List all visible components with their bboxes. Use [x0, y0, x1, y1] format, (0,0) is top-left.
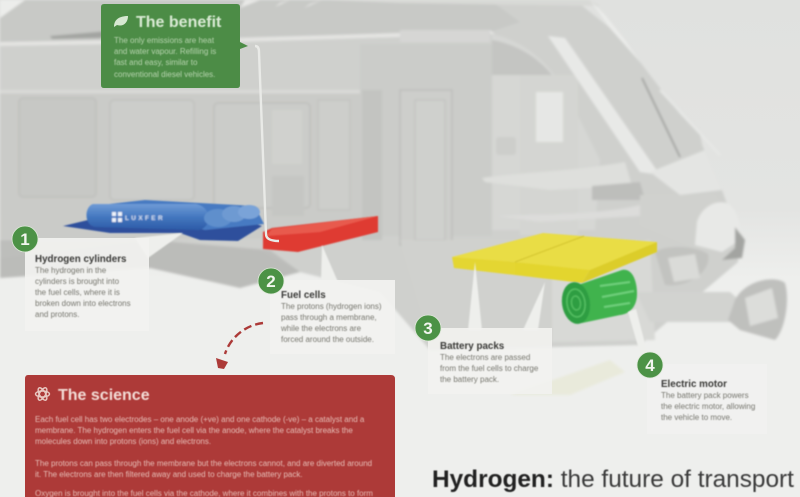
callout 2 text: forced around the outside.	[281, 335, 374, 344]
front nose	[640, 195, 738, 250]
callout 4 text	[661, 379, 755, 422]
title: Hydrogen: the future of transport	[432, 466, 794, 493]
callout 4 text: Electric motor	[661, 379, 727, 390]
badge 3: 3	[423, 319, 433, 338]
illustration: transparent train	[0, 0, 787, 395]
callout 1 text: and protons.	[35, 310, 79, 319]
dashboard shelf	[482, 162, 632, 190]
icon: atom	[36, 386, 50, 402]
panel: the benefit	[101, 4, 248, 88]
connector: benefit to fuel cells	[255, 46, 279, 241]
callout 2 text: Fuel cells	[281, 290, 326, 301]
train body	[0, 0, 738, 350]
science text: The protons can pass through the membrane but the electrons cannot, and are diverted around	[35, 459, 372, 468]
panel: the science	[25, 375, 395, 497]
science text	[35, 415, 373, 497]
arrow: fuel cells to science	[216, 323, 263, 369]
callout 1 text	[35, 254, 131, 319]
floor shadow below train	[0, 240, 300, 272]
science text: molecules down into protons (ions) and electrons.	[35, 437, 211, 446]
callout 4 text: the vehicle to move.	[661, 413, 732, 422]
callout 1 text: Hydrogen cylinders	[35, 254, 127, 265]
callout 3: battery packs	[415, 315, 552, 394]
battery packs	[452, 233, 657, 283]
callout 1 text: cylinders is brought into	[35, 277, 120, 286]
white leader lines	[135, 233, 648, 360]
floor reflections	[510, 360, 625, 395]
brand label: LUXFER	[125, 215, 165, 222]
callout 1 text: the fuel cells, where it is	[35, 288, 120, 297]
callout 2 text: pass through a membrane,	[281, 313, 377, 322]
door section	[360, 44, 492, 236]
callout 2 text	[280, 290, 382, 344]
callout 3 text: from the fuel cells to charge	[440, 364, 539, 373]
callout 4 text: The battery pack powers	[661, 391, 749, 400]
callout 4 text: the electric motor, allowing	[661, 402, 755, 411]
fuel cell block	[263, 216, 378, 252]
science text: it. The electrons are then filtered away and used to charge the battery pack.	[35, 470, 303, 479]
electric motor	[559, 270, 637, 326]
callout 3 text: the battery pack.	[440, 375, 499, 384]
callout 2 text: while the electrons are	[280, 324, 362, 333]
science text: Each fuel cell has two electrodes – one anode (+ve) and one cathode (-ve) – a catalyst and a	[35, 415, 365, 424]
side panels	[0, 90, 362, 93]
benefit text	[114, 36, 216, 79]
windscreen	[555, 36, 705, 172]
icon: leaf	[114, 16, 128, 27]
benefit text: conventional diesel vehicles.	[114, 70, 215, 79]
badge 2: 2	[266, 272, 276, 291]
callout 1 text: broken down into electrons	[35, 299, 131, 308]
interior cab	[492, 34, 600, 230]
badge 1: 1	[20, 230, 30, 249]
science heading: The science	[58, 387, 150, 404]
science text: membrane. The hydrogen enters the fuel cell via the anode, where the catalyst breaks the	[35, 426, 353, 435]
callout 3 text: The electrons are passed	[440, 353, 530, 362]
callout 3 text: Battery packs	[440, 341, 505, 352]
benefit text: and water vapour. Refilling is	[114, 47, 216, 56]
benefit text: fast and easy, similar to	[114, 58, 198, 67]
callout 3 text	[440, 341, 539, 384]
callout 1: hydrogen cylinders	[12, 226, 149, 331]
benefit heading: The benefit	[136, 14, 222, 31]
callout 1 text: The hydrogen in the	[35, 266, 107, 275]
benefit text: The only emissions are heat	[114, 36, 215, 45]
badge 4: 4	[645, 356, 655, 375]
callout 2 text: The protons (hydrogen ions)	[281, 302, 382, 311]
roof band	[0, 0, 520, 42]
undercarriage	[400, 240, 640, 346]
callout 4: electric motor	[637, 352, 767, 434]
callout 2: fuel cells	[258, 268, 395, 354]
hydrogen cylinders	[63, 200, 264, 241]
wheels and couplers	[655, 247, 708, 285]
